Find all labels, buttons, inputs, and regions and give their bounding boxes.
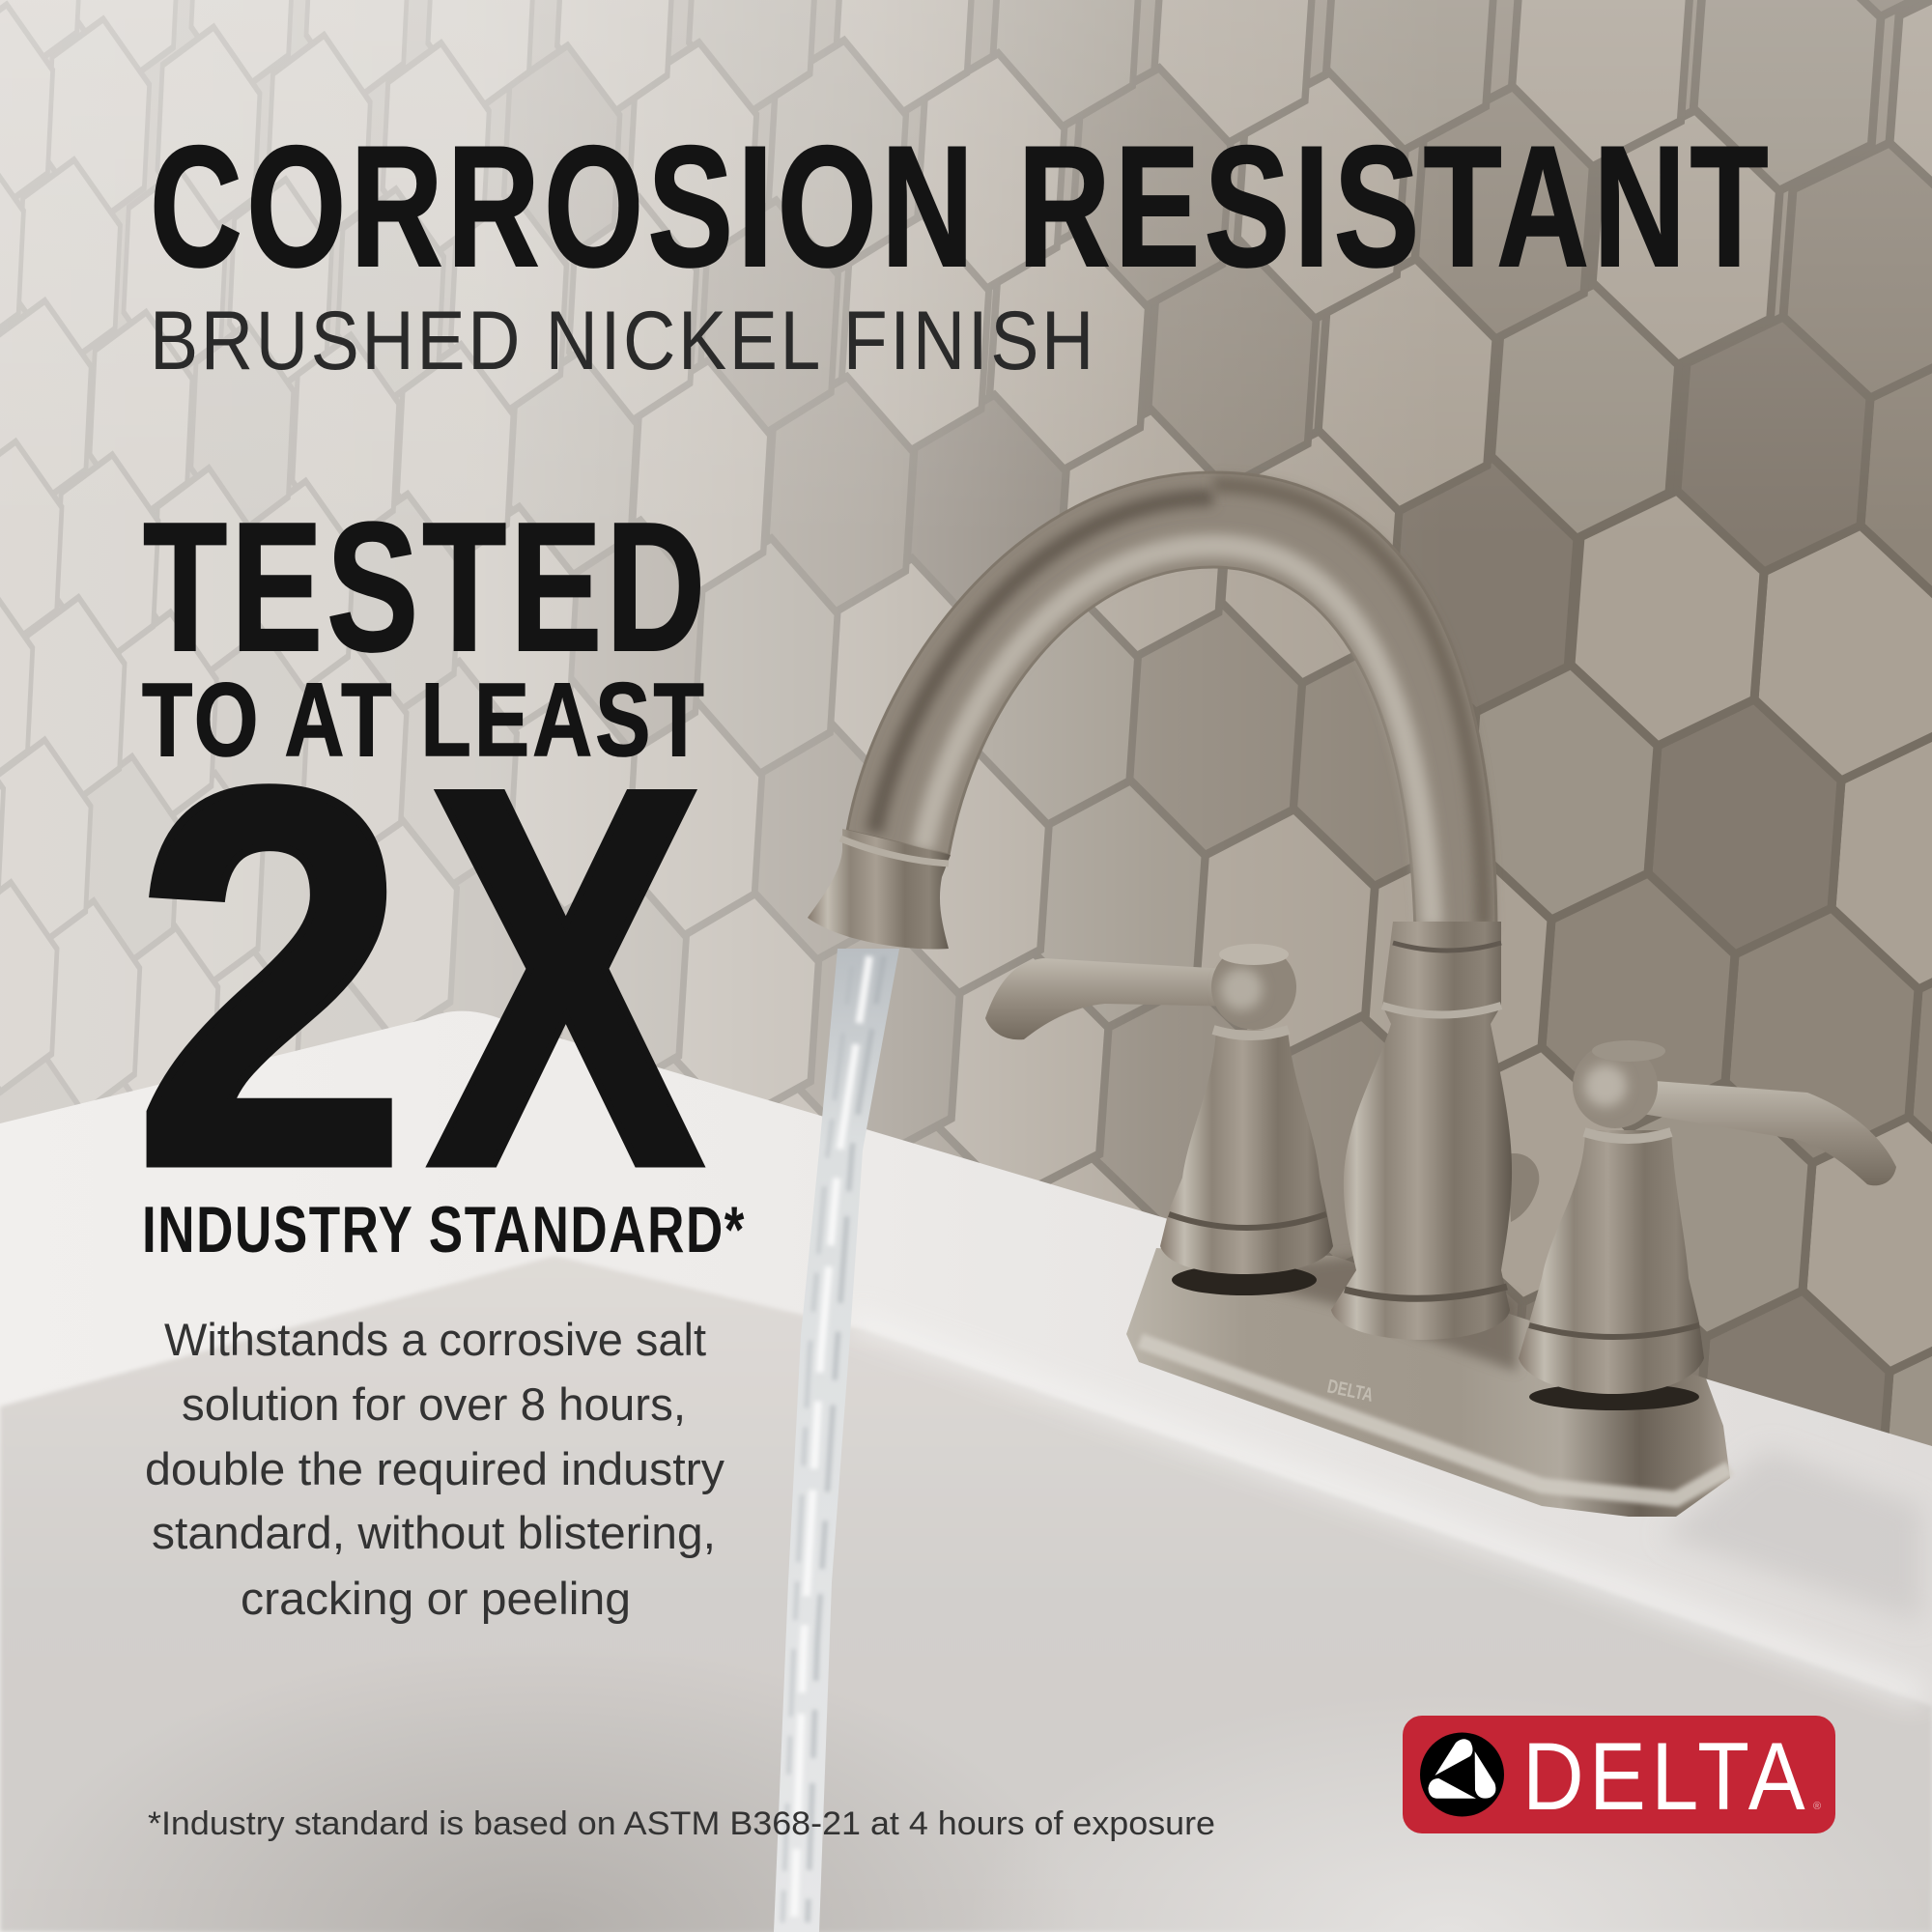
faucet back lever <box>1507 1153 1539 1222</box>
claim: industry standard: INDUSTRY STANDARD* <box>142 1193 746 1266</box>
body copy paragraph: double the required industry <box>145 1443 725 1494</box>
body copy paragraph: cracking or peeling <box>241 1573 631 1624</box>
body copy paragraph <box>145 1314 725 1624</box>
big number: 2X: 2 <box>133 677 408 1277</box>
left handle <box>985 944 1333 1295</box>
faucet base plate <box>1126 1248 1730 1517</box>
icon: Delta triangle emblem <box>1420 1733 1504 1816</box>
big number: 2X <box>133 677 705 1277</box>
faucet spout arch <box>847 472 1496 932</box>
DELTA mark on base: DELTA <box>1325 1376 1375 1406</box>
faucet spout tip <box>808 829 951 950</box>
body copy paragraph: standard, without blistering, <box>152 1507 716 1558</box>
faucet central body <box>1331 922 1512 1340</box>
subheading: brushed nickel finish: BRUSHED NICKEL FINISH <box>150 295 1096 387</box>
logo wordmark: DELTA <box>1522 1722 1810 1830</box>
big number: 2X: X <box>428 677 705 1277</box>
claim: tested: TESTED <box>143 485 709 690</box>
background: white sink <box>0 1011 1932 1932</box>
logo: Delta: ® <box>1813 1801 1821 1812</box>
chrome faucet <box>808 472 1896 1517</box>
claim: to at least: TO AT LEAST <box>142 661 707 778</box>
logo: Delta <box>1403 1716 1835 1833</box>
body copy paragraph: solution for over 8 hours, <box>182 1378 686 1430</box>
running water stream <box>774 949 899 1932</box>
right handle <box>1519 1040 1896 1410</box>
body copy paragraph: Withstands a corrosive salt <box>164 1314 706 1365</box>
footnote: *Industry standard is based on ASTM B368-21 at 4 hours of exposure <box>148 1805 1215 1842</box>
